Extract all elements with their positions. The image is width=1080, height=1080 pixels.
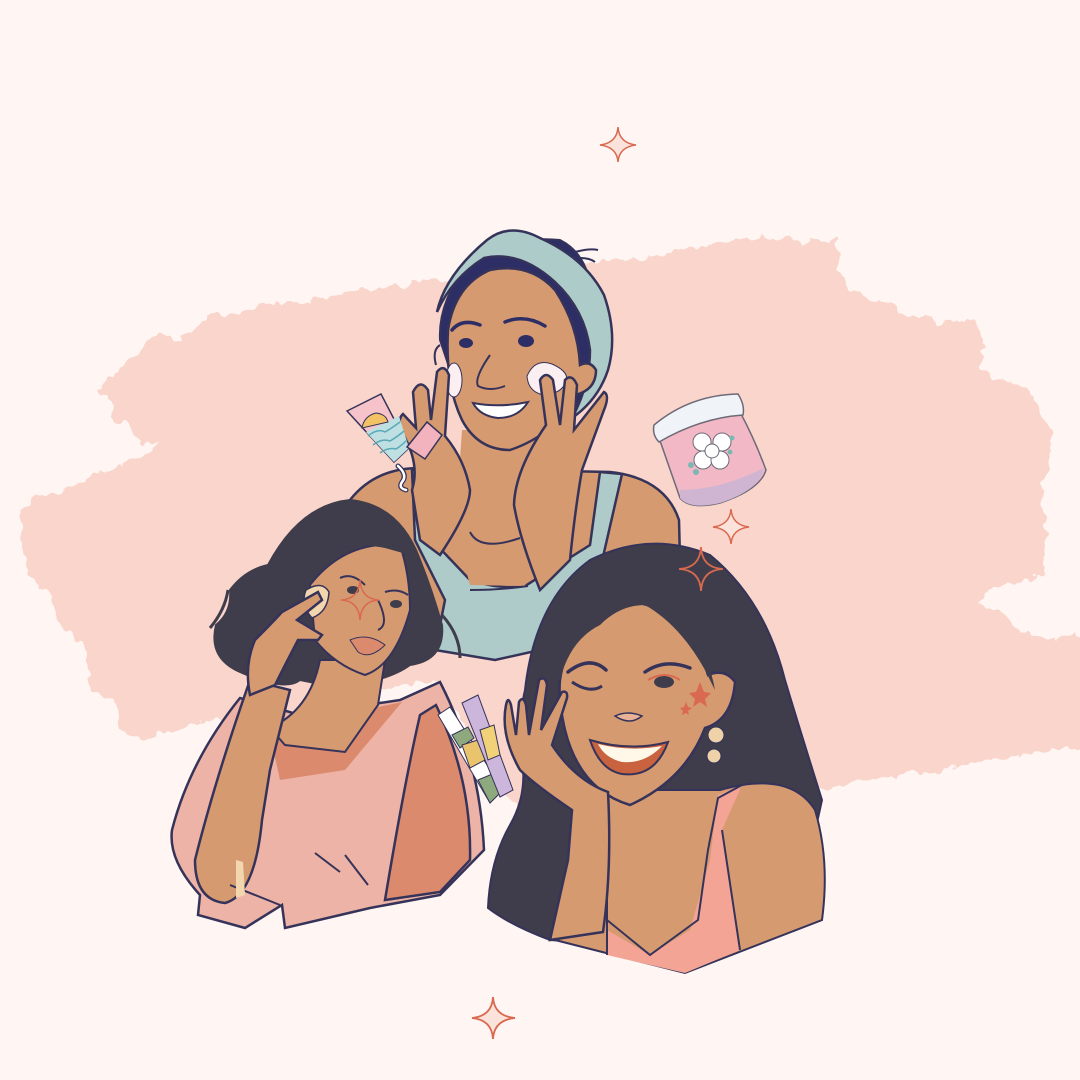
- hair curl: [210, 590, 460, 658]
- winking eye: [572, 682, 602, 689]
- nose: [477, 355, 505, 389]
- cotton pad: [304, 585, 329, 618]
- figure: top woman with headband: [350, 230, 680, 660]
- lips: [350, 637, 385, 655]
- earring: [707, 727, 724, 763]
- face: [560, 603, 735, 805]
- headband: [437, 230, 612, 418]
- neck lines: [470, 532, 528, 590]
- icon: skincare tubes: [438, 695, 513, 803]
- hair back: [488, 544, 822, 950]
- hair fringe: [295, 525, 410, 590]
- blouse shoulder tone: [268, 702, 402, 780]
- star on hair: [679, 547, 723, 591]
- eyes: [459, 335, 534, 348]
- teeth: [598, 744, 662, 762]
- face: [310, 544, 410, 675]
- figure: right woman winking: [488, 544, 825, 973]
- blouse folds: [230, 853, 368, 905]
- tank top: [412, 468, 622, 660]
- left hand: [400, 368, 470, 555]
- star: top: [600, 127, 636, 162]
- eyebrows: [452, 319, 545, 330]
- neck: [455, 430, 548, 586]
- right hand: [514, 375, 607, 590]
- hair back: [440, 239, 592, 410]
- chest and shoulders: [555, 783, 825, 973]
- foam on cheeks: [446, 362, 567, 397]
- hair strands on forehead: [548, 595, 715, 690]
- face: [448, 268, 596, 450]
- eye shadow: [648, 675, 680, 680]
- open eye: [654, 676, 674, 688]
- icon: cream jar: [654, 394, 766, 506]
- hand on cheek: [505, 678, 609, 940]
- hand: [248, 592, 322, 695]
- mouth: [590, 740, 668, 774]
- blouse: [172, 682, 484, 928]
- eyes: [347, 586, 402, 608]
- bracelet: [236, 860, 245, 898]
- pink top: [607, 785, 742, 973]
- brush stroke backdrop: [20, 236, 1080, 812]
- smile: [473, 402, 528, 418]
- arm: [195, 680, 290, 903]
- star on cheek: [341, 580, 379, 620]
- figure: left woman with cotton pad: [172, 500, 484, 928]
- strap outline: [607, 785, 742, 955]
- star: beside jar: [713, 509, 749, 544]
- star: bottom: [472, 997, 515, 1039]
- icon: sunscreen tube: [347, 394, 442, 490]
- face features: [340, 576, 408, 630]
- sleeve shading: [385, 705, 470, 900]
- star freckles: [680, 682, 711, 715]
- shoulders: [350, 468, 680, 620]
- hair back: [214, 500, 442, 688]
- neck and chest: [270, 660, 385, 752]
- eyebrows: [568, 663, 690, 672]
- hair strands: [435, 249, 598, 365]
- nose: [615, 713, 642, 721]
